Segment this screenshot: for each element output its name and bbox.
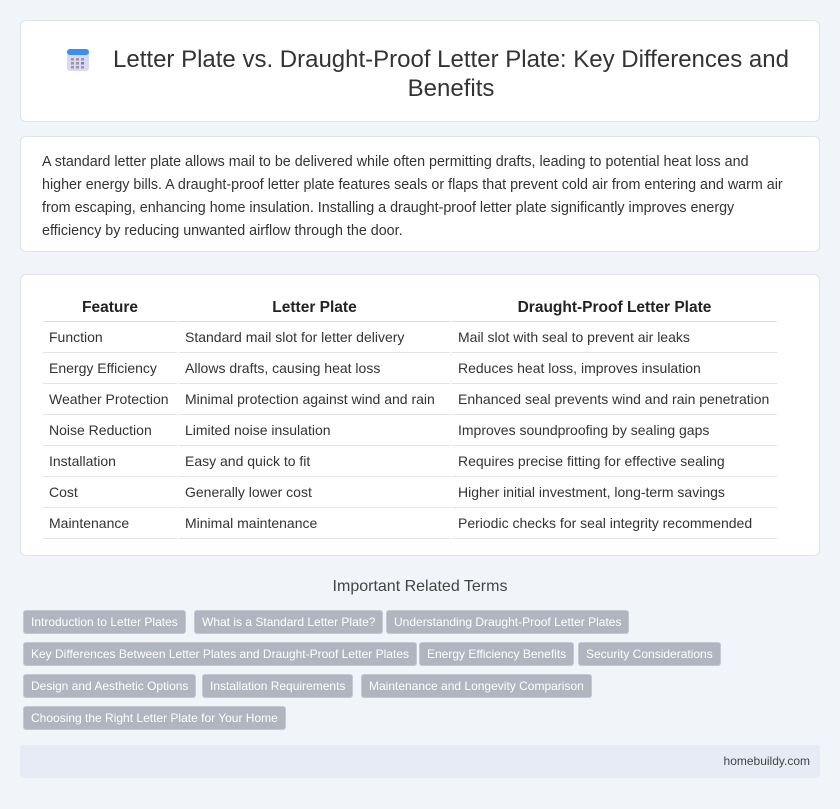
footer	[20, 745, 820, 778]
comparison table: Requires precise fitting for effective sealing	[458, 453, 725, 469]
header card	[20, 20, 820, 122]
comparison table: Draught-Proof Letter Plate	[518, 299, 711, 316]
related terms tags: Installation Requirements	[210, 679, 345, 693]
related terms tags: Understanding Draught-Proof Letter Plates	[394, 615, 621, 629]
comparison table: Periodic checks for seal integrity recommended	[458, 515, 752, 531]
comparison table: Installation	[49, 453, 116, 469]
title: Letter Plate vs. Draught-Proof Letter Plate: Key Differences and Benefits	[113, 46, 789, 102]
comparison table: Minimal maintenance	[185, 515, 317, 531]
related terms tags: What is a Standard Letter Plate?	[202, 615, 375, 629]
comparison table: Easy and quick to fit	[185, 453, 310, 469]
comparison table	[43, 299, 777, 539]
related terms tags: Key Differences Between Letter Plates and Draught-Proof Letter Plates	[31, 647, 409, 661]
comparison table: Allows drafts, causing heat loss	[185, 360, 380, 376]
related terms tags: Introduction to Letter Plates	[31, 615, 178, 629]
related terms tags: Security Considerations	[586, 647, 713, 661]
comparison table: Weather Protection	[49, 391, 169, 407]
related terms tags: Energy Efficiency Benefits	[427, 647, 566, 661]
related terms tags: Design and Aesthetic Options	[31, 679, 188, 693]
comparison table: Improves soundproofing by sealing gaps	[458, 422, 709, 438]
comparison table: Cost	[49, 484, 78, 500]
comparison table: Higher initial investment, long-term savings	[458, 484, 725, 500]
intro text card	[20, 136, 820, 252]
comparison table: Mail slot with seal to prevent air leaks	[458, 329, 690, 345]
intro text card: A standard letter plate allows mail to be delivered while often permitting drafts, leading to potential heat loss and higher energy bills. A draught-proof letter plate features seals or flaps that prevent cold air from entering and warm air from escaping, enhancing home insulation. Installing a draught-proof letter plate significantly improves energy efficiency by reducing unwanted airflow through the door.	[42, 154, 783, 239]
comparison table: Generally lower cost	[185, 484, 312, 500]
comparison table: Standard mail slot for letter delivery	[185, 329, 404, 345]
comparison table: Enhanced seal prevents wind and rain penetration	[458, 391, 769, 407]
comparison table: Limited noise insulation	[185, 422, 331, 438]
comparison table: Maintenance	[49, 515, 129, 531]
comparison table: Letter Plate	[272, 299, 357, 316]
comparison table: Energy Efficiency	[49, 360, 157, 376]
related terms tags: Maintenance and Longevity Comparison	[369, 679, 584, 693]
comparison table: Reduces heat loss, improves insulation	[458, 360, 701, 376]
comparison table: Noise Reduction	[49, 422, 152, 438]
related terms tags: Choosing the Right Letter Plate for Your Home	[31, 711, 278, 725]
comparison table: Function	[49, 329, 103, 345]
icon: calendar	[67, 49, 89, 71]
footer: homebuildy.com	[724, 754, 810, 768]
comparison table: Minimal protection against wind and rain	[185, 391, 435, 407]
comparison table card	[20, 274, 820, 556]
comparison table: Feature	[82, 299, 138, 316]
related terms heading: Important Related Terms	[333, 578, 507, 595]
